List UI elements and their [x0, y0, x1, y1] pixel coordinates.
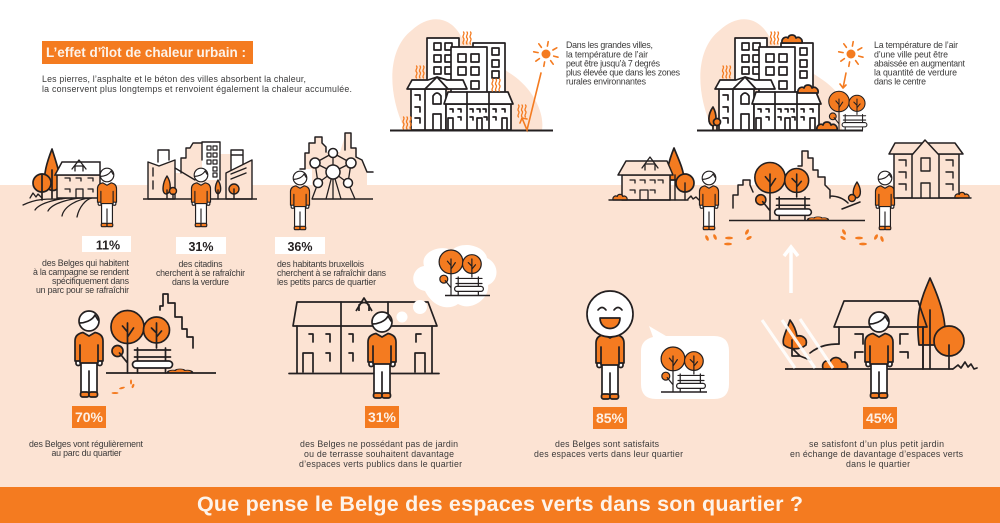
value: 36% [275, 237, 325, 254]
text block: greenery lowers temperature: abaissée en augmentant [874, 58, 966, 68]
icon: roof dormer [356, 298, 372, 311]
icon: ground line [785, 368, 953, 370]
value: 70%: 70% [75, 409, 104, 425]
text block: seven degrees: plus élevée que dans les zones [566, 68, 681, 78]
value: 85%: 85% [596, 410, 625, 426]
icon: ground line [390, 130, 553, 132]
text block: greenery lowers temperature [874, 40, 966, 86]
icon: park in speech bubble [661, 347, 705, 392]
text: 70% caption: au parc du quartier [52, 448, 122, 458]
icon: left house and trees [609, 148, 699, 200]
value: 11%: 11% [96, 238, 120, 252]
icon: small tree [709, 107, 720, 130]
icon: house [289, 302, 439, 374]
text: 45% caption: dans le quartier [846, 459, 910, 469]
icon: skyline and Atomium [300, 133, 373, 199]
panel: 70% go to the park [29, 294, 216, 458]
text: 70% caption: des Belges vont régulièrement [29, 439, 144, 449]
icon: skyline [160, 294, 193, 348]
icon: shrubs [817, 122, 837, 130]
text: 31% caption: des Belges ne possédant pas de jardin [300, 439, 458, 449]
footer banner: Que pense le Belge des espaces verts dans son quartier ? [197, 492, 803, 516]
icon: park thought [439, 250, 483, 295]
icon: white crossing stripes [762, 319, 833, 368]
icon: fallen tree [783, 320, 839, 360]
arrow: sun ray [840, 73, 846, 88]
text: 45% caption: en échange de davantage d’espaces verts [790, 449, 964, 459]
icon: park trees and bench [829, 91, 867, 130]
icon: buildings [407, 38, 513, 130]
icon: park and skyline [729, 151, 865, 220]
icon: farmhouse [23, 160, 100, 217]
panel: 31% city dwellers [143, 142, 257, 287]
value: 31% [176, 237, 226, 254]
text: 11% caption [33, 258, 130, 295]
text block: heat island explanation: la conservent plus longtemps et renvoient également la chaleur accumulée. [42, 84, 352, 94]
value: 45%: 45% [866, 410, 895, 426]
text: 11% caption: un parc pour se rafraîchir [36, 285, 129, 295]
value: 36%: 36% [287, 240, 313, 254]
text: 36% caption: des habitants bruxellois [277, 259, 365, 269]
text: 31% caption [156, 259, 245, 287]
text: 85% caption: des Belges sont satisfaits [555, 439, 660, 449]
text: 85% caption: des espaces verts dans leur quartier [534, 449, 683, 459]
text block: seven degrees: peut être jusqu’à 7 degrés [566, 58, 661, 68]
figure: person [75, 311, 103, 397]
text: 31% caption: des citadins [178, 259, 223, 269]
icon: footprints left [704, 229, 752, 245]
text: 31% caption: d’espaces verts publics dans le quartier [299, 459, 462, 469]
value: 45% [863, 407, 897, 429]
value: 70% [72, 406, 106, 428]
arrow: reflected sun ray [520, 73, 541, 130]
icon: footprints right [840, 229, 884, 245]
text: 36% caption [277, 259, 387, 287]
value: 31%: 31% [188, 240, 214, 254]
icon: leaves [168, 369, 192, 373]
heading: urban heat island [42, 41, 253, 64]
panel: 36% Brussels [275, 133, 387, 287]
panel: 45% smaller garden [762, 278, 977, 469]
value: 31%: 31% [368, 409, 397, 425]
value: 31% [365, 406, 399, 428]
value: 11% [82, 236, 131, 252]
text: 11% caption: spécifiquement dans [52, 276, 130, 286]
icon: house [834, 301, 927, 369]
icon: roof bushes [782, 35, 818, 93]
icon: heat waves [722, 32, 779, 78]
blob: peach backdrop [700, 19, 842, 130]
icon: bushes [823, 358, 848, 369]
text block: greenery lowers temperature: La température de l’air [874, 40, 958, 50]
figure: smiley person [587, 291, 633, 399]
background peach band [0, 185, 1000, 487]
text block: heat island explanation: Les pierres, l’asphalte et le béton des villes absorbent la chaleur, [42, 74, 306, 84]
figure: person [865, 312, 893, 398]
panel: 11% countryside [23, 149, 131, 295]
panel: city without greenery [390, 19, 558, 131]
figure: person [290, 171, 310, 230]
icon: speech bubble [641, 326, 729, 399]
value: 85% [593, 407, 627, 429]
text: 45% caption: se satisfont d’un plus petit jardin [809, 439, 944, 449]
icon: cityscape [143, 142, 257, 199]
icon: trees [918, 278, 964, 369]
footer banner [0, 487, 1000, 523]
text block: seven degrees [566, 40, 681, 86]
figure: person [368, 312, 396, 398]
text: 31% caption [299, 439, 462, 469]
text: 31% caption: dans la verdure [172, 277, 229, 287]
figure: person [97, 168, 117, 227]
text: 45% caption [790, 439, 964, 469]
icon: thought bubble [396, 245, 496, 322]
text: 31% caption: cherchent à se rafraîchir [156, 268, 245, 278]
panel: 31% without garden [289, 245, 496, 469]
icon: trees [33, 149, 60, 200]
text: 11% caption: des Belges qui habitent [42, 258, 130, 268]
text block: seven degrees: rurales environnantes [566, 76, 647, 86]
icon: ground line [697, 130, 863, 132]
figure: person right [875, 171, 895, 230]
blob: peach backdrop [392, 19, 542, 130]
icon: heat waves [403, 32, 526, 129]
icon: right house [889, 140, 971, 198]
panel: city with greenery [697, 19, 867, 131]
text block: greenery lowers temperature: d’une ville peut être [874, 50, 948, 60]
heading: urban heat island: L’effet d’îlot de chaleur urbain : [46, 45, 246, 60]
panel: 85% satisfied [534, 291, 729, 459]
text block: greenery lowers temperature: dans le centre [874, 76, 926, 86]
figure: person [191, 168, 211, 227]
icon: grass [953, 362, 977, 369]
text block: heat island explanation [42, 74, 352, 94]
text block: seven degrees: la température de l’air [566, 50, 648, 60]
text: 85% caption [534, 439, 683, 459]
text block: greenery lowers temperature: la quantité de verdure [874, 68, 957, 78]
panel: house to park scene [609, 140, 971, 245]
icon: footprints [112, 380, 135, 394]
icon: ground line [106, 372, 216, 374]
text: 11% caption: à la campagne se rendent [33, 267, 130, 277]
text: 36% caption: cherchent à se rafraîchir dans [277, 268, 387, 278]
text: 31% caption: ou de terrasse souhaitent davantage [304, 449, 454, 459]
text: 70% caption [29, 439, 144, 458]
text: 36% caption: les petits parcs de quartier [277, 277, 376, 287]
text block: seven degrees: Dans les grandes villes, [566, 40, 653, 50]
icon: sun [534, 42, 558, 66]
icon: buildings [715, 38, 821, 130]
figure: person left [699, 171, 719, 230]
arrow: white up arrow [784, 247, 798, 293]
icon: sun [839, 42, 863, 66]
icon: park [111, 310, 172, 373]
